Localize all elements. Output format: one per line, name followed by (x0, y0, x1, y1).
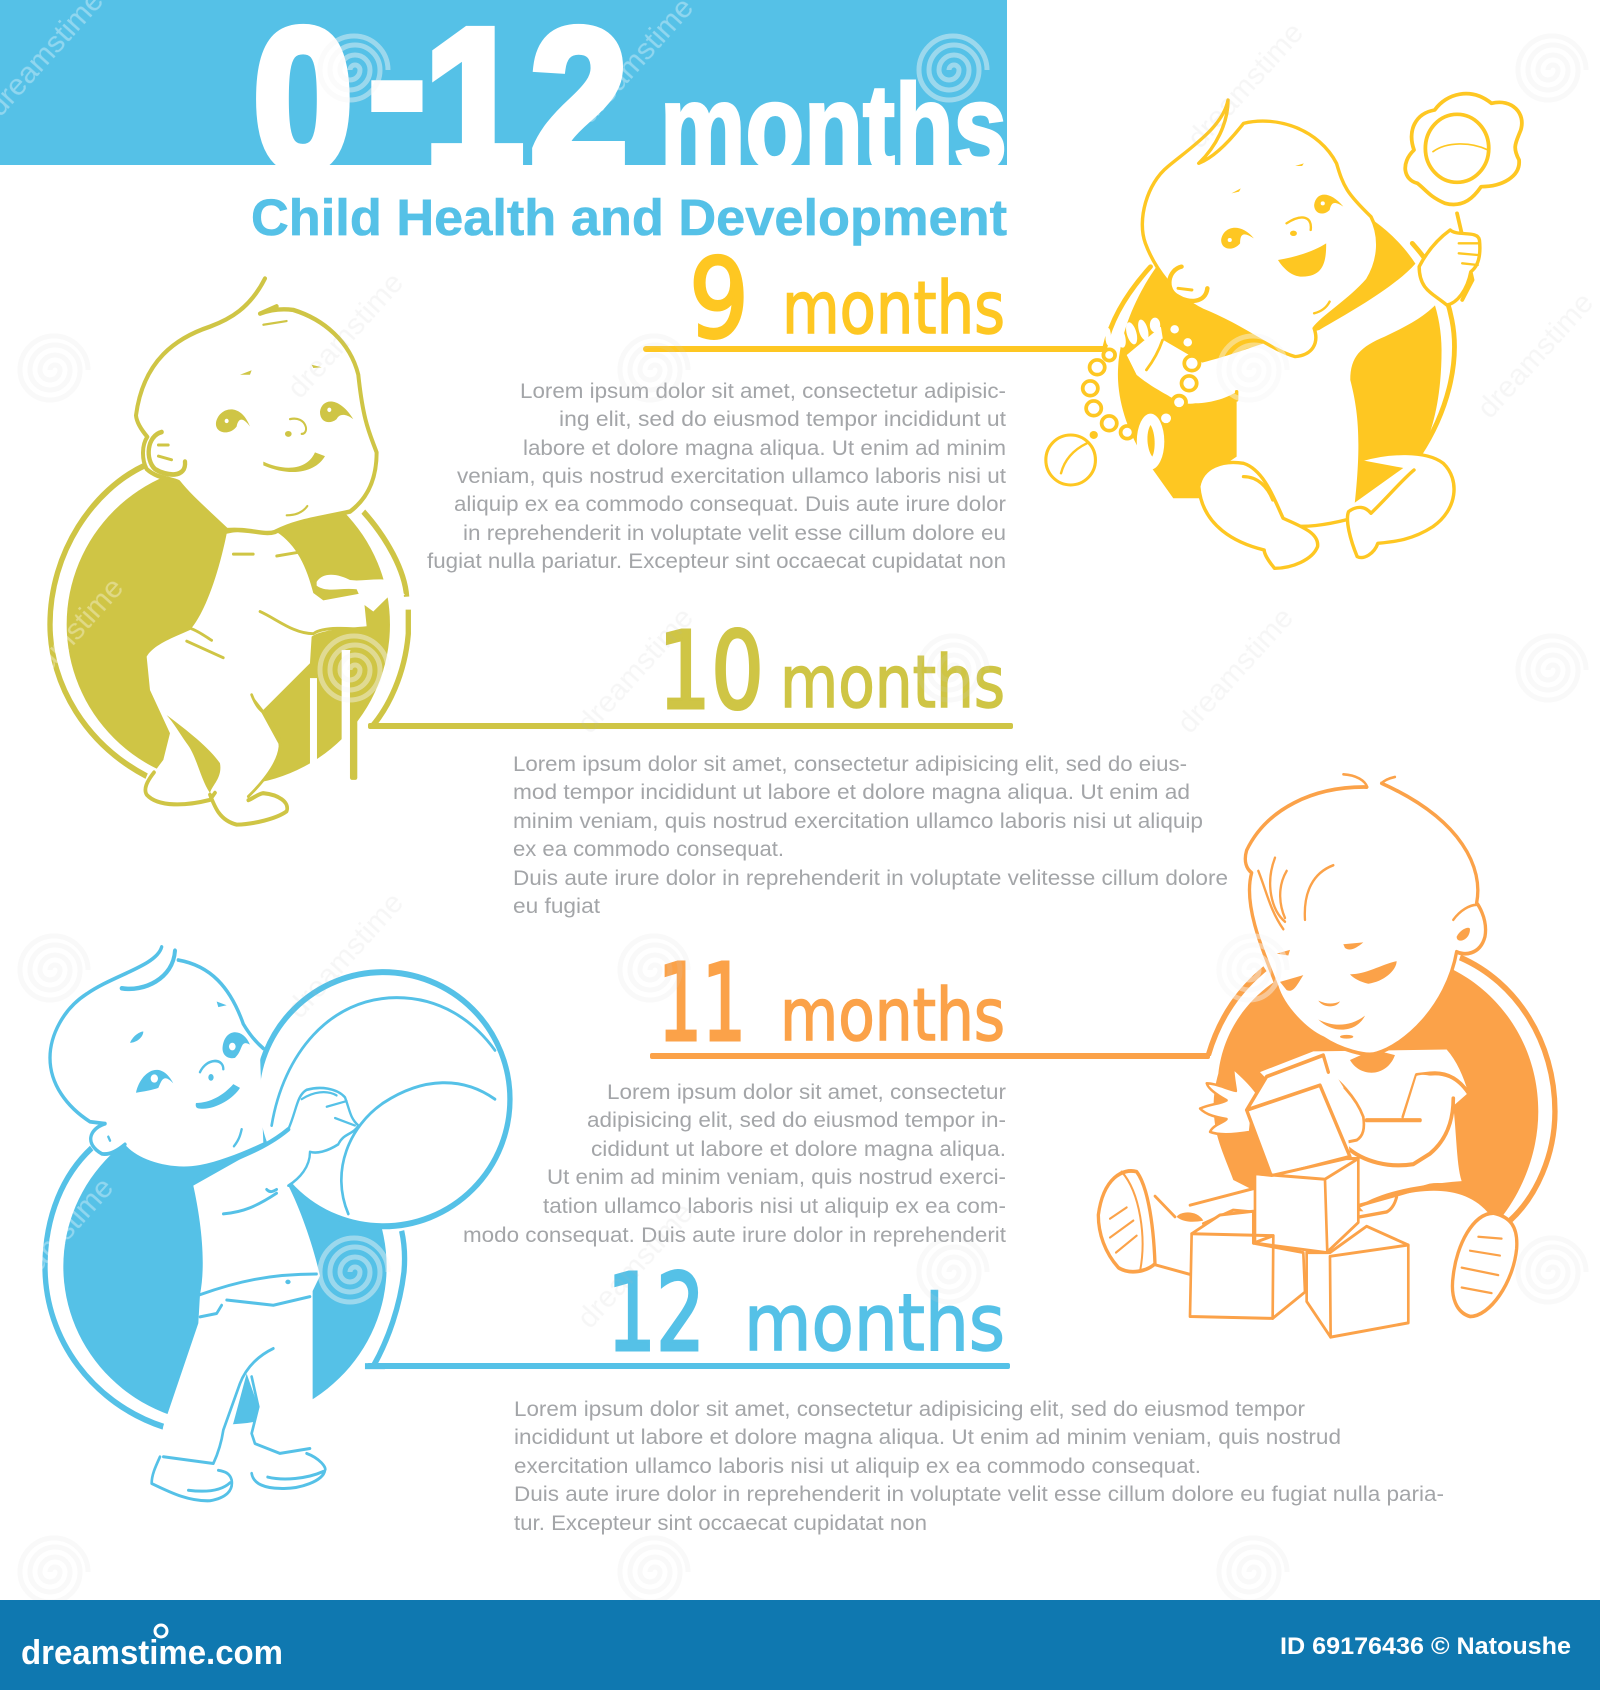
text block 11 months: adipisicing elit, sed do eiusmod tempor in- (587, 1108, 1006, 1132)
text block 9 months: in reprehenderit in voluptate velit esse cillum dolore eu (463, 521, 1006, 545)
watermark text: dreamstime (281, 266, 410, 405)
body (145, 532, 367, 825)
text block 12 months: Duis aute irure dolor in reprehenderit in voluptate velit esse cillum dolore eu fugiat nulla paria- (514, 1482, 1444, 1506)
watermark text: dreamstime (1471, 286, 1600, 425)
chair bars (310, 678, 317, 765)
text block 10 months: mod tempor incididunt ut labore et dolore magna aliqua. Ut enim ad (513, 780, 1190, 804)
ring (1105, 243, 1454, 455)
head (1142, 100, 1378, 357)
text block 12 months: incididunt ut labore et dolore magna aliqua. Ut enim ad minim veniam, quis nostrud (514, 1425, 1341, 1449)
number 11: 11 (658, 942, 746, 1066)
watermark text: dreamstime (571, 601, 700, 740)
disc (63, 1109, 387, 1424)
right leg (1347, 453, 1454, 557)
word months: months (744, 1279, 1005, 1369)
arm (1347, 1075, 1454, 1166)
right hand (1320, 1072, 1364, 1144)
text block 12 months: exercitation ullamco laboris nisi ut aliquip ex ea commodo consequat. (514, 1454, 1201, 1478)
connector line 12 months (367, 1363, 1010, 1369)
footer logo spiral (155, 1625, 167, 1637)
text block 11 months: Lorem ipsum dolor sit amet, consectetur (607, 1080, 1006, 1104)
rattle flower (1405, 94, 1522, 205)
word months: months (780, 973, 1005, 1057)
text block 11 months (463, 1080, 1006, 1247)
illustration: baby with blocks, orange (1098, 774, 1555, 1337)
text block 11 months: cididunt ut labore et dolore magna aliqua. (591, 1137, 1006, 1161)
hand with beads (1105, 318, 1163, 375)
ring and connector corner (1208, 957, 1555, 1221)
face: eyes brows nose mouth chin (1221, 163, 1343, 277)
text block 12 months (514, 1397, 1444, 1535)
left leg (1199, 462, 1318, 568)
right shoe (1452, 1213, 1517, 1316)
block stack (1190, 1159, 1408, 1337)
knee mark (248, 695, 280, 796)
right leg (1360, 1191, 1490, 1283)
text block 11 months: tation ullamco laboris nisi ut aliquip ex ea com- (543, 1194, 1006, 1218)
palm (1127, 327, 1163, 375)
word months: months (780, 640, 1005, 724)
hand on ball (288, 1088, 358, 1186)
watermark text: dreamstime (1181, 16, 1310, 155)
neckline (1350, 1050, 1395, 1073)
heading: 9 months (689, 235, 1005, 363)
ring and connector corner (45, 1148, 405, 1427)
text block 10 months: ex ea commodo consequat. (513, 837, 784, 861)
heading: 12 months (607, 1252, 1005, 1376)
header banner (0, 0, 1007, 165)
watermark text: dreamstime (281, 886, 410, 1025)
text block 9 months: veniam, quis nostrud exercitation ullamco laboris nisi ut (457, 464, 1006, 488)
title word months: months (660, 60, 1007, 194)
rattle handle (1457, 213, 1473, 300)
body (152, 1129, 325, 1502)
text block 10 months: minim veniam, quis nostrud exercitation ullamco laboris nisi ut aliquip (513, 809, 1203, 833)
torso bottom line (1237, 392, 1349, 526)
watermark text: dreamstime (1171, 601, 1300, 740)
pants and shoe details (152, 1189, 325, 1501)
word months: months (782, 266, 1005, 350)
hand on chair (317, 575, 405, 612)
text block 11 months: modo consequat. Duis aute irure dolor in reprehenderit (463, 1223, 1006, 1247)
text block 10 months: Lorem ipsum dolor sit amet, consectetur adipisicing elit, sed do eius- (513, 752, 1187, 776)
heading: 11 months (658, 942, 1005, 1066)
illustration: baby with big ball, blue (45, 947, 510, 1502)
text block 9 months: Lorem ipsum dolor sit amet, consectetur adipisic- (520, 379, 1006, 403)
text block 9 months: aliquip ex ea commodo consequat. Duis aute irure dolor (454, 492, 1006, 516)
rattle centre (1425, 114, 1489, 182)
connector line 11 months (650, 1053, 1210, 1059)
watermark text (0, 0, 1600, 1335)
face: eyes brows nose mouth (130, 1001, 250, 1109)
ear (149, 432, 185, 474)
back leg wedge (167, 715, 220, 793)
ring and connector corner (50, 465, 408, 776)
footer image credit: ID 69176436 © Natoushe (1280, 1633, 1571, 1660)
ear (1169, 267, 1207, 301)
illustration: baby standing at chair, olive (50, 278, 408, 825)
number 10: 10 (658, 610, 764, 734)
teething ring (1137, 414, 1164, 470)
sleeve (1403, 1073, 1468, 1117)
illustration: baby with rattle, yellow (1046, 94, 1522, 568)
watermark text: dreamstime (571, 1196, 700, 1335)
held block (1247, 1055, 1350, 1177)
title (253, 0, 1007, 211)
subtitle: Child Health and Development (251, 189, 1007, 246)
text block 10 months: eu fugiat (513, 894, 600, 918)
head (1245, 783, 1486, 1054)
left hand (1200, 1068, 1257, 1134)
text block 9 months (427, 379, 1006, 573)
disc (1214, 952, 1538, 1215)
left leg (1152, 1189, 1257, 1275)
text block 9 months: fugiat nulla pariatur. Excepteur sint occaecat cupidatat non (427, 549, 1006, 573)
toy ball (1046, 435, 1095, 485)
arm shadow (195, 1129, 288, 1180)
connector line 10 months (368, 723, 1013, 729)
footer bar (0, 1600, 1600, 1690)
text block 11 months: Ut enim ad minim veniam, quis nostrud exerci- (547, 1165, 1006, 1189)
foot outline (145, 772, 287, 825)
bead string (1083, 323, 1199, 439)
left shoe (1098, 1171, 1155, 1272)
text block 10 months (513, 752, 1228, 918)
hair tufts (1258, 774, 1477, 929)
connector line 9 months (643, 346, 1106, 352)
text block 12 months: tur. Excepteur sint occaecat cupidatat non (514, 1511, 927, 1535)
text block 9 months: labore et dolore magna aliqua. Ut enim ad minim (523, 436, 1006, 460)
disc (1118, 190, 1442, 513)
text block 12 months: Lorem ipsum dolor sit amet, consectetur adipisicing elit, sed do eiusmod tempor (514, 1397, 1305, 1421)
head (136, 278, 377, 533)
footer logo: dreamstime.com (21, 1634, 283, 1672)
fingers (1105, 318, 1160, 349)
text block 10 months: Duis aute irure dolor in reprehenderit in voluptate velitesse cillum dolore (513, 866, 1228, 890)
head (50, 947, 263, 1166)
torso (1260, 1050, 1468, 1206)
body detail lines (187, 552, 365, 658)
raised hand (1419, 230, 1480, 305)
face: eyes nose mouth (1277, 928, 1470, 1039)
text block 9 months: ing elit, sed do eiusmod tempor incididunt ut (559, 407, 1006, 431)
heading: 10 months (658, 610, 1005, 734)
face: eyes brows nose mouth chin (216, 365, 353, 472)
ball (257, 972, 510, 1226)
number 9: 9 (689, 235, 749, 363)
number 12: 12 (607, 1252, 705, 1376)
disc (67, 464, 390, 785)
body (1127, 263, 1440, 527)
watermark text: dreamstime (1, 571, 130, 710)
